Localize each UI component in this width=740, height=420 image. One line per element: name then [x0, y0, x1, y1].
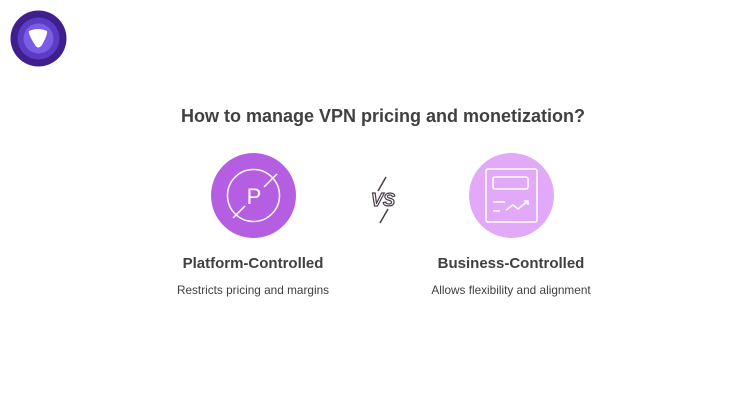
title: How to manage VPN pricing and monetization?: [181, 106, 585, 126]
icon: platform: [211, 153, 296, 238]
icon: platform: P: [247, 184, 261, 209]
icon: vs: [371, 176, 396, 224]
heading: business: Business-Controlled: [438, 255, 584, 272]
text: platform: Restricts pricing and margins: [177, 283, 329, 297]
heading: platform: Platform-Controlled: [183, 255, 323, 272]
icon: vs: VS: [371, 190, 395, 210]
text: business: Allows flexibility and alignment: [431, 283, 591, 297]
logo: [10, 10, 66, 66]
icon: business: [469, 153, 554, 238]
